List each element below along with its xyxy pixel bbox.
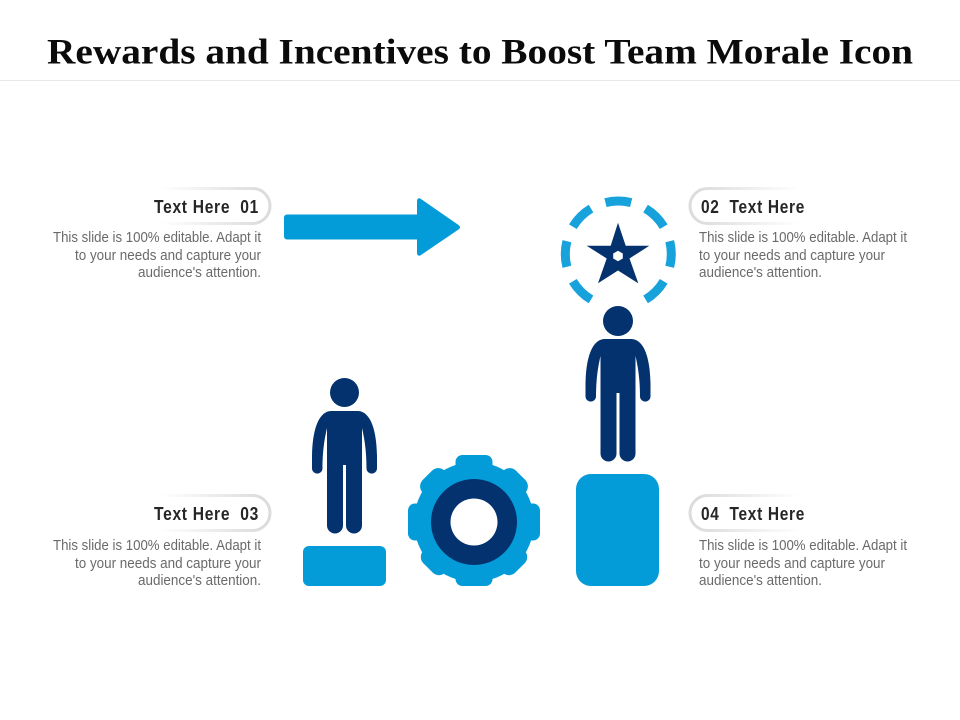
body 04: to your needs and capture your [699, 555, 885, 572]
body 01: to your needs and capture your [75, 247, 261, 264]
heading 02: 02 Text Here [701, 197, 805, 217]
callout 04 [690, 496, 908, 589]
heading 01: Text Here 01 [154, 197, 259, 217]
tall pedestal [576, 474, 659, 586]
pill 03 [160, 496, 270, 530]
body 03 [53, 537, 262, 589]
short pedestal [303, 546, 386, 586]
body 02: to your needs and capture your [699, 247, 885, 264]
body 04: This slide is 100% editable. Adapt it [699, 537, 908, 554]
pill 04 [690, 496, 800, 530]
body 02: This slide is 100% editable. Adapt it [699, 229, 908, 246]
callout 02 [690, 188, 908, 281]
person on tall pedestal [586, 306, 650, 462]
body 02: audience's attention. [699, 264, 822, 281]
body 02 [699, 229, 908, 281]
icon: star [587, 223, 649, 283]
arrow [284, 198, 460, 256]
body 03: audience's attention. [138, 572, 261, 589]
pill 02 [690, 188, 800, 224]
body 01 [53, 229, 262, 281]
body 01: audience's attention. [138, 264, 261, 281]
body 01: This slide is 100% editable. Adapt it [53, 229, 262, 246]
body 03: This slide is 100% editable. Adapt it [53, 537, 262, 554]
heading 03: Text Here 03 [154, 504, 259, 524]
callout 01 [53, 188, 270, 281]
person on short pedestal [312, 378, 377, 534]
icon: dashed ring [565, 201, 671, 301]
callout 03 [53, 496, 270, 589]
body 04: audience's attention. [699, 572, 822, 589]
title: Rewards and Incentives to Boost Team Morale Icon [47, 32, 913, 72]
body 04 [699, 537, 908, 589]
pill 01 [160, 188, 270, 224]
heading 04: 04 Text Here [701, 504, 805, 524]
body 03: to your needs and capture your [75, 555, 261, 572]
icon: gear [408, 455, 540, 586]
